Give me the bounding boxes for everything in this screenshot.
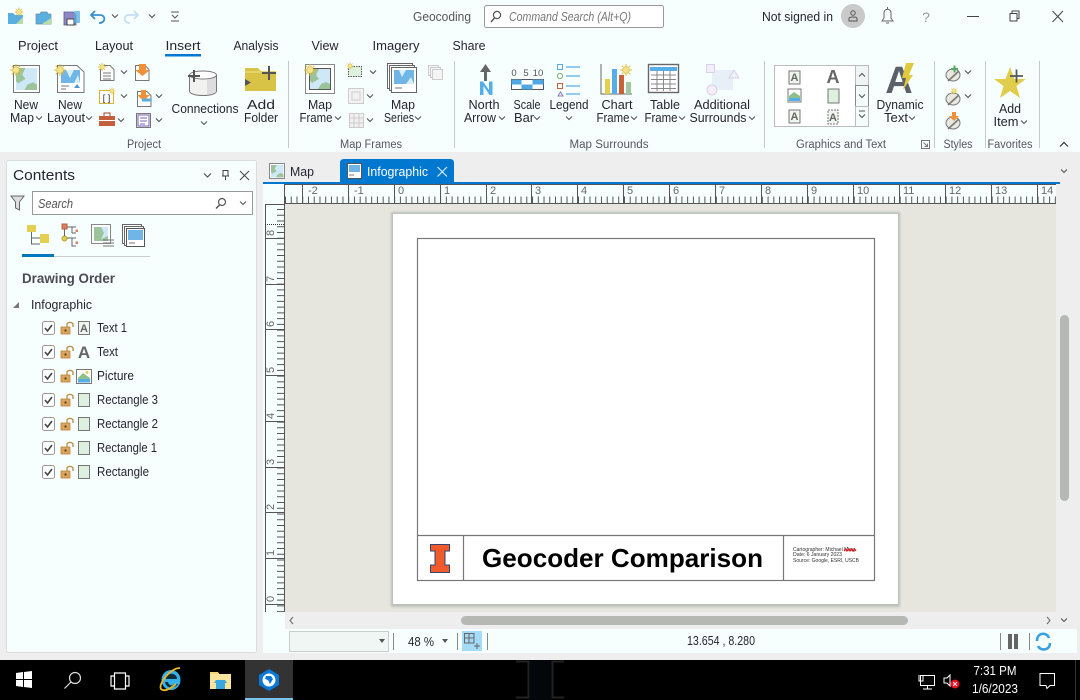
vertical ruler: 1 [265,550,277,556]
group: Map Frames: Frame [300,111,333,125]
account status: Not signed in [762,10,833,24]
icon: connections [188,70,216,96]
vertical ruler: 0 [265,596,277,602]
cursor coordinates: 13.654 , 8.280 [687,634,755,648]
small map frame icons [346,62,376,128]
group: Map Surrounds: North [468,98,500,112]
horizontal ruler: 1 [444,185,450,197]
snapping toggle [462,631,482,651]
view tabs: Map [290,165,314,179]
icon: chart frame [601,64,632,94]
group: Map Surrounds: Legend [550,98,589,112]
icon: scale bar: 5 [523,68,529,79]
group: Map Surrounds [464,64,755,151]
map frame rectangle [418,238,874,580]
horizontal ruler: 0 [398,185,404,197]
vertical scrollbar [1056,184,1077,629]
dialog launcher [922,140,930,148]
horizontal ruler: 10 [857,185,869,197]
layout canvas [285,204,1056,612]
ribbon panel [0,0,1080,152]
system tray: 7:31 PM [974,664,1016,678]
panel: layout view [263,159,1077,653]
group: Graphics and Text: Text [884,111,909,125]
icon: map frame [304,64,334,94]
icon: search [64,672,80,688]
ribbon tabs: Imagery [372,39,420,53]
symbol gallery: A [829,112,837,124]
horizontal ruler: 5 [627,185,633,197]
layer row: Rectangle 3 [42,393,158,407]
credits text [793,547,860,564]
layout page [391,212,900,607]
group: Project: Folder [244,111,278,125]
icon: additional surrounds [706,64,739,95]
horizontal ruler: -2 [308,185,318,197]
group: Map Surrounds: Scale [514,98,541,112]
icon: new map [10,64,40,92]
ribbon tabs: Project [18,39,59,53]
icon: new layout [54,64,84,92]
symbol gallery: A [791,111,799,123]
ribbon tabs: Layout [95,39,134,53]
pause drawing [1008,634,1018,649]
icon: legend [557,64,580,96]
icon: add folder [245,66,276,91]
drawing order heading: Drawing Order [22,271,116,286]
system tray [919,660,1076,700]
layer row: Text: Text [97,345,118,359]
icon: block I logo [430,544,450,572]
horizontal scrollbar [285,612,1056,629]
icon: internet explorer [161,668,180,690]
ribbon tabs: Insert [166,39,201,53]
system tray: 1/6/2023 [972,682,1018,696]
account status [762,4,865,28]
group divider [288,61,1040,148]
horizontal ruler: 4 [581,185,587,197]
vertical ruler [265,184,284,612]
icon: add item star [994,67,1026,98]
view tabs: Infographic [367,165,428,179]
icon: north arrow [480,64,492,95]
horizontal ruler: -1 [354,185,364,197]
layer row: Rectangle 2 [42,417,158,431]
icon: table frame [648,64,678,92]
layer row: Text: A [78,343,90,362]
group: Project: New [58,98,83,112]
group: Graphics and Text [774,60,930,151]
group: Map Surrounds: Arrow [464,111,497,125]
icon: scale bar [511,68,544,90]
small project icons [98,63,162,127]
icon: task view [111,673,129,689]
window controls [967,11,1063,22]
ribbon tabs: Analysis [234,39,278,53]
group: Styles [944,66,973,151]
horizontal ruler: 14 [1041,185,1053,197]
layer row: Text 1: A [80,323,88,335]
group: Favorites [988,67,1033,151]
contents search box: Search [38,197,73,211]
vertical ruler: 7 [265,276,277,282]
group: Styles: Styles [944,139,973,151]
icon: scale bar: 0 [511,68,517,79]
horizontal ruler: 13 [995,185,1007,197]
pane controls [204,170,249,180]
group: Map Frames: Map [308,98,332,112]
group: Project: Layout [47,111,86,125]
symbol gallery [774,66,868,126]
quick access toolbar [8,8,179,25]
icon: disabled refresh [428,66,442,80]
layer row: Rectangle 3: Rectangle 3 [97,393,158,407]
horizontal ruler: 8 [765,185,771,197]
horizontal ruler [284,184,1056,204]
horizontal ruler: 7 [719,185,725,197]
vertical ruler: 4 [265,413,277,419]
ribbon tabs: Share [452,39,486,53]
group: Favorites: Favorites [988,139,1033,151]
group: Map Frames: Map [391,98,415,112]
group: Map Frames: Map Frames [340,139,402,151]
group: Map Surrounds: Additional [694,98,750,112]
vertical ruler: 2 [265,504,277,510]
horizontal ruler: 11 [903,185,914,197]
refresh [1037,634,1050,649]
vertical ruler: 5 [265,367,277,373]
taskbar [0,660,1080,700]
command search box [484,6,664,28]
group: Map Surrounds: Map Surrounds [570,139,649,151]
group: Map Frames: Series [384,111,414,125]
layer row: Rectangle [42,465,149,479]
icon: file explorer [210,672,231,689]
icon: start [16,671,32,688]
icon: map series [388,64,416,92]
group: Map Surrounds: Frame [644,111,678,125]
map tree root: Infographic [31,298,92,312]
horizontal ruler: 6 [673,185,679,197]
map title: Geocoder Comparison [482,543,763,573]
active app: ArcGIS Pro [245,660,293,700]
vertical ruler: 6 [265,321,277,327]
icon: dynamic text: A [885,60,913,102]
group: Map Surrounds: Surrounds [690,111,746,125]
vertical ruler: 8 [265,230,277,236]
icon: scale bar: 10 [533,68,543,79]
group: Graphics and Text: Dynamic [876,98,924,112]
group: Map Surrounds: Frame [596,111,630,125]
contents heading: Contents [13,167,75,184]
horizontal ruler: 9 [811,185,817,197]
credits text: Date: 6 January 2023 [793,552,842,558]
view tabs [27,224,144,246]
layer row: Picture [42,369,134,384]
ribbon tabs: View [312,39,339,53]
group: Project: New [14,98,39,112]
status bar: 48 % [408,635,434,649]
symbol gallery: A [826,67,840,87]
credits text: Cartographer: Michael Ming [793,547,855,553]
panel: contents [6,160,256,652]
icon: notifications bell [882,7,893,23]
layer row: Rectangle: Rectangle [97,465,149,479]
group: Map Surrounds: Bar [514,111,534,125]
layer row: Text 1 [42,321,127,335]
active view tab underline [22,254,54,257]
command search box: Command Search (Alt+Q) [509,10,631,24]
horizontal ruler: 3 [535,185,541,197]
group: Map Frames [300,62,442,151]
collapse ribbon chevron [1060,142,1068,146]
symbol gallery: A [791,72,799,84]
small project icons: [ ] [103,93,110,103]
contents search box [32,192,252,214]
group: Project: Project [127,139,162,151]
group: Project: Connections [172,102,238,116]
status bar [290,631,1050,652]
group: Project [10,63,278,151]
help mark: ? [922,9,930,25]
ghost text cursor [516,660,564,700]
group: Project: Add [247,98,275,112]
app title: Geocoding [413,10,471,24]
group: Favorites: Item [994,115,1018,129]
group: Favorites: Add [999,102,1021,116]
group: Graphics and Text: Graphics and Text [796,139,887,151]
layer row: Picture: Picture [97,369,134,383]
group: Map Surrounds: Chart [602,98,633,112]
layer row: Rectangle 2: Rectangle 2 [97,417,158,431]
icon: filter funnel [11,196,24,210]
view tabs [263,159,1067,184]
horizontal ruler: 2 [490,185,496,197]
ribbon tabs [18,39,486,56]
group: Project: Map [10,111,34,125]
layer row: Text 1: Text 1 [97,321,127,335]
layer row: Rectangle 1 [42,441,157,455]
vertical ruler: 3 [265,459,277,465]
layer row: Rectangle 1: Rectangle 1 [97,441,157,455]
credits text: Source: Google, ESRI, USCB [793,558,860,564]
group: Map Surrounds: Table [650,98,680,112]
title strip [417,535,875,581]
horizontal ruler: 12 [949,185,961,197]
layer row: Text [42,343,118,362]
